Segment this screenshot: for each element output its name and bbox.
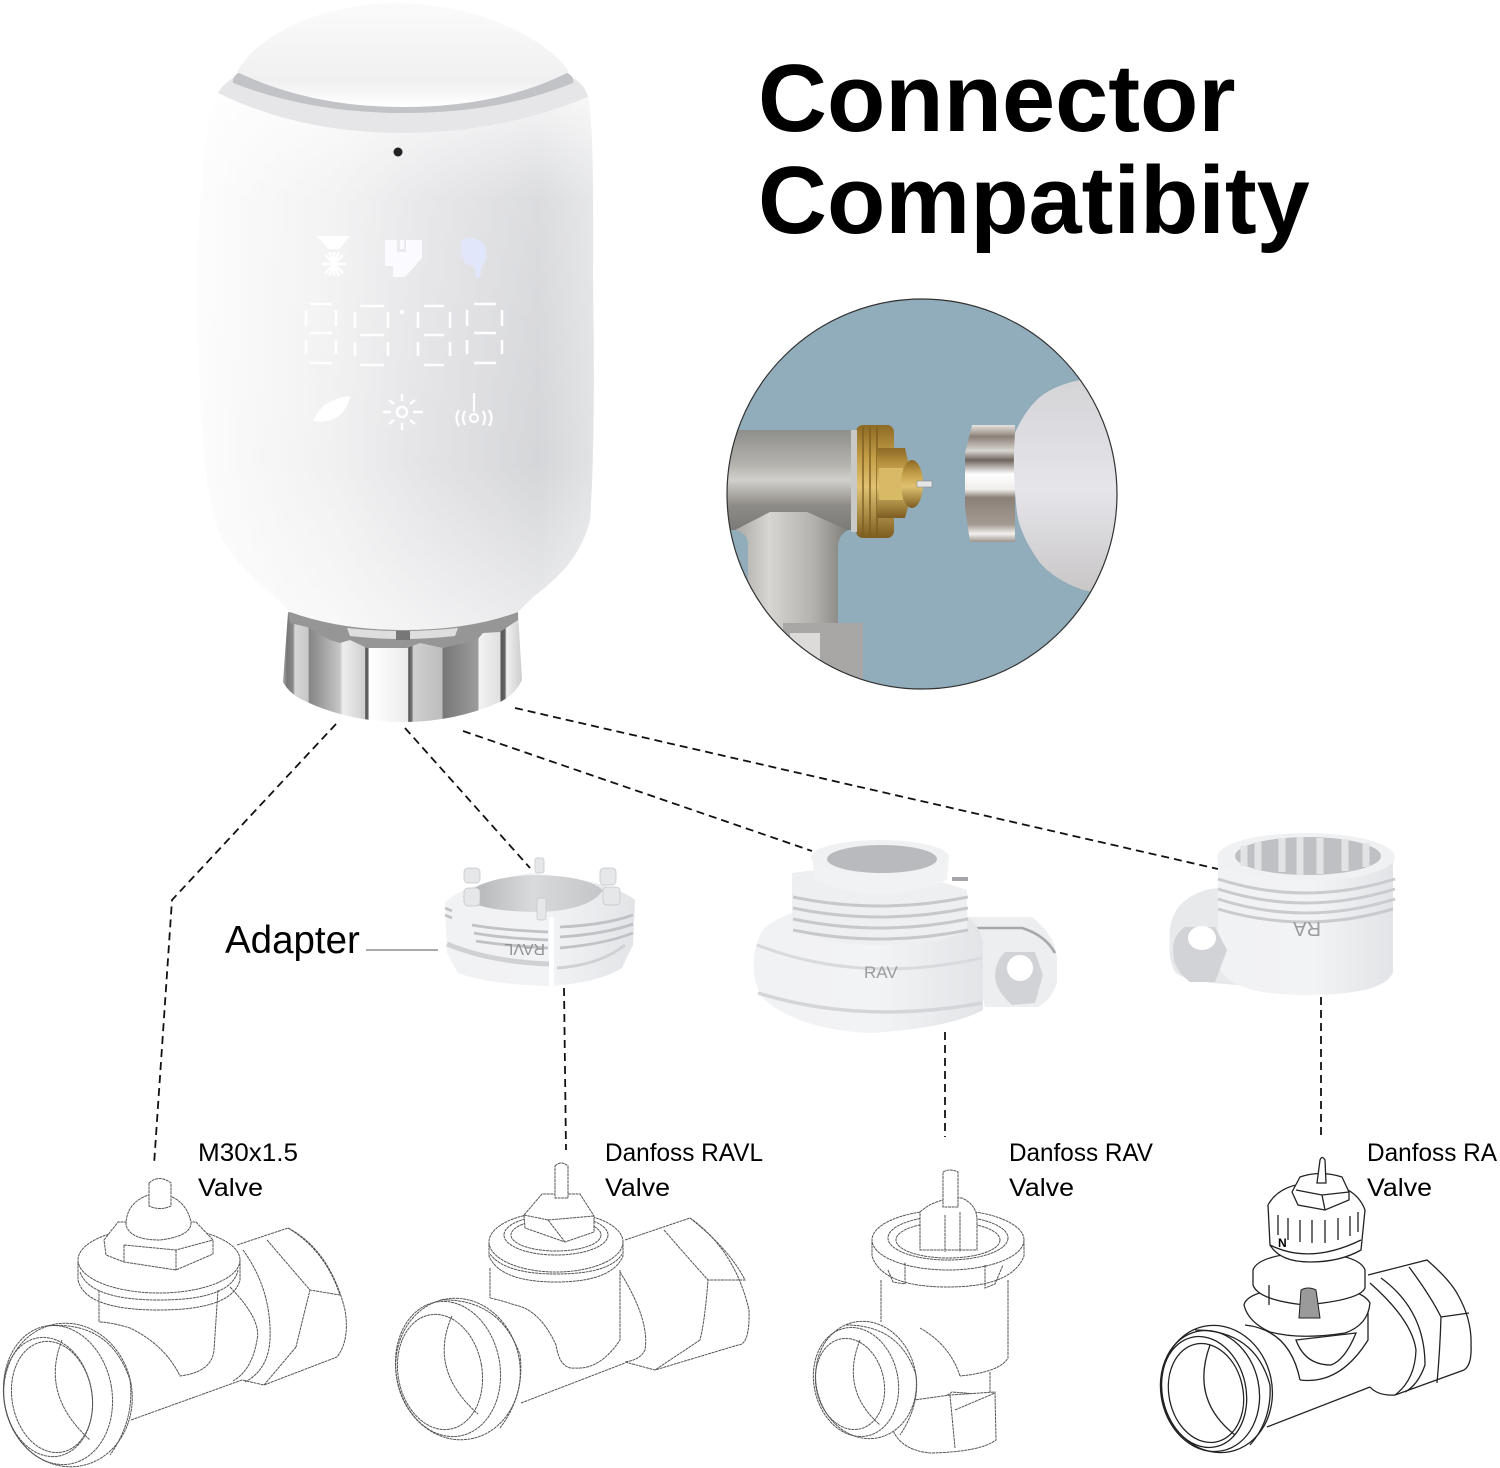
valve drawing: Danfoss RAV — [803, 1170, 1024, 1453]
dashed connector: RA lower — [1320, 997, 1322, 1137]
brass hex — [877, 448, 910, 518]
thermostat body — [198, 77, 594, 630]
white thermostat ball — [1014, 380, 1116, 592]
dashed connector: RAVL upper — [405, 728, 530, 868]
valve drawing: M30x1.5 — [0, 1178, 346, 1468]
valve label: M30x1.5: Valve — [198, 1174, 263, 1202]
valve drawing: Danfoss RA — [1149, 1158, 1471, 1463]
valve label: Danfoss RAVL — [605, 1139, 763, 1202]
down pipe — [735, 512, 848, 640]
adapter opening — [463, 875, 603, 912]
dashed connector: RAVL lower — [564, 988, 566, 1150]
title — [758, 46, 1310, 254]
valve label: Danfoss RA: Valve — [1367, 1174, 1432, 1202]
dashed connector: M30x1.5 — [154, 724, 336, 1165]
brass nut and pin — [901, 460, 923, 508]
LED dot — [394, 148, 402, 156]
valve label: Danfoss RAVL: Danfoss RAVL — [605, 1139, 763, 1167]
dashed connector: RAV upper — [463, 731, 812, 851]
icon: leaf — [313, 396, 350, 422]
dashed connector: RA upper — [515, 708, 1218, 869]
valve drawing: Danfoss RAVL — [385, 1163, 749, 1450]
product: smart thermostat head — [198, 3, 594, 722]
chrome ring — [965, 425, 1015, 542]
top cap — [237, 3, 569, 107]
valve label: Danfoss RAV: Danfoss RAV — [1009, 1139, 1153, 1167]
valve drawing: Danfoss RA: N — [1278, 1236, 1287, 1250]
adapter: RAVL: RAVL — [504, 940, 545, 957]
icon: save/floppy — [385, 240, 422, 277]
icon: laser/spark — [317, 236, 350, 276]
valve label: Danfoss RA — [1367, 1139, 1497, 1202]
valve label: M30x1.5 — [198, 1139, 298, 1202]
adapter label: Adapter — [225, 919, 360, 962]
inset: valve connection close-up — [720, 299, 1130, 703]
top rim band — [218, 78, 588, 133]
valve label: M30x1.5: M30x1.5 — [198, 1139, 298, 1167]
icon: antenna signal — [456, 393, 492, 426]
adapter: RAVL — [445, 858, 635, 986]
grey groove under cap — [233, 72, 573, 113]
digit display — [306, 304, 502, 365]
adapter: RA — [1170, 833, 1395, 995]
body highlight — [198, 77, 594, 630]
dashed connector: RAV lower — [944, 1032, 946, 1137]
adapter: RAV: RAV — [864, 963, 898, 982]
title: Connector — [758, 46, 1236, 152]
title: Compatibity — [758, 148, 1310, 254]
pipe — [720, 430, 855, 530]
icon: hand — [461, 238, 486, 278]
valve label: Danfoss RA: Danfoss RA — [1367, 1139, 1497, 1167]
brass thread — [856, 425, 894, 538]
valve label: Danfoss RAV: Valve — [1009, 1174, 1074, 1202]
valve label: Danfoss RAVL: Valve — [605, 1174, 670, 1202]
adapter: RA: RA — [1293, 917, 1321, 939]
icon: sun — [383, 394, 423, 430]
valve label: Danfoss RAV — [1009, 1139, 1153, 1202]
metal connector ring — [283, 610, 522, 722]
pipe block — [783, 623, 863, 679]
adapter: RAV — [754, 840, 1057, 1033]
